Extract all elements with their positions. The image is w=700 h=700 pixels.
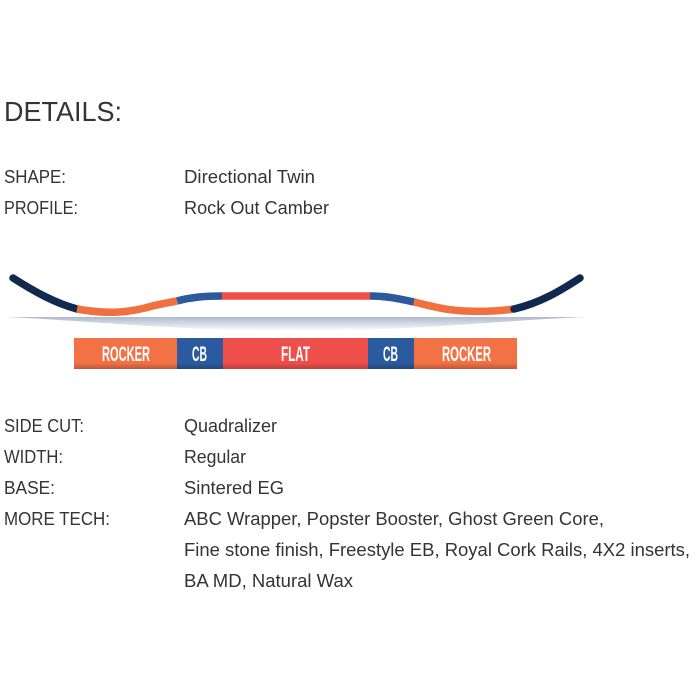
label: rocker left: ROCKER (102, 342, 150, 366)
board tip: right (514, 278, 580, 309)
board profile curve (13, 278, 580, 312)
more tech label: MORE TECH: (4, 509, 110, 529)
profile legend bar: CB (383, 342, 398, 366)
width value: Regular (184, 447, 246, 467)
segment: camber right (368, 338, 414, 369)
width label: WIDTH: (4, 447, 63, 467)
label: flat: FLAT (281, 342, 310, 366)
more tech line 1: ABC Wrapper, Popster Booster, Ghost Green Core, (184, 509, 604, 529)
shape label: SHAPE: (4, 167, 66, 187)
profile legend bar (74, 338, 517, 369)
more tech line 3: BA MD, Natural Wax (184, 571, 353, 591)
more tech line 2: Fine stone finish, Freestyle EB, Royal Cork Rails, 4X2 inserts, (184, 540, 690, 560)
bar bottom shading (74, 338, 517, 369)
shape value: Directional Twin (184, 167, 315, 187)
segment: rocker right (414, 338, 517, 369)
board segment: right camber (370, 296, 414, 302)
profile legend bar: CB (192, 342, 207, 366)
segment: camber left (177, 338, 223, 369)
profile label: PROFILE: (4, 198, 78, 218)
segment: rocker left (74, 338, 177, 369)
spec list: construction (4, 416, 690, 591)
base value: Sintered EG (184, 478, 284, 498)
side cut value: Quadralizer (184, 416, 277, 436)
more tech value (184, 509, 690, 591)
profile value: Rock Out Camber (184, 198, 329, 218)
board segment: right rocker (414, 302, 514, 311)
side cut label: SIDE CUT: (4, 416, 84, 436)
spec list: shape and profile (4, 167, 329, 218)
board tip: left (13, 278, 77, 309)
board segment: flat (222, 292, 370, 300)
board segment: left rocker (77, 301, 177, 312)
board segment: left camber (177, 296, 222, 301)
base label: BASE: (4, 478, 55, 498)
ground shadow (5, 317, 584, 331)
label: rocker right: ROCKER (442, 342, 491, 366)
title: DETAILS: (4, 96, 122, 127)
segment: flat (223, 338, 368, 369)
